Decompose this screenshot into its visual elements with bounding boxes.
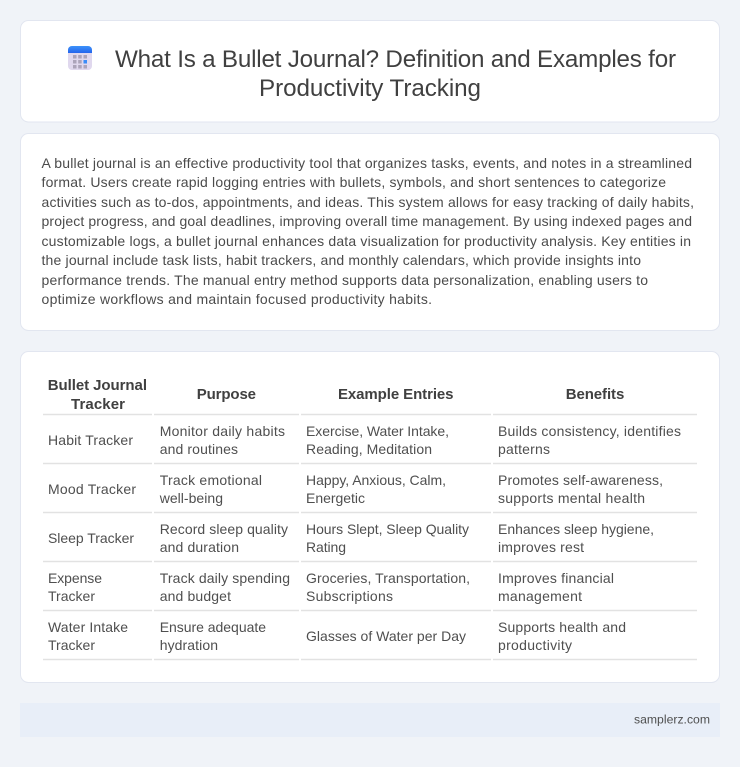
row: sleep tracker: Sleep Tracker [48, 530, 134, 546]
text block: definition paragraph: activities such as to-dos, appointments, and ideas. This system allows for easy tracking of daily habits, [42, 194, 694, 210]
title: Productivity Tracking [259, 75, 481, 102]
table header row: Benefits [566, 386, 624, 403]
row: water intake tracker [48, 619, 626, 653]
row: mood tracker: Track emotional [160, 472, 262, 488]
row: expense tracker: Improves financial [498, 570, 614, 586]
row: expense tracker: and budget [160, 588, 231, 604]
row: expense tracker: Expense [48, 570, 102, 586]
title [115, 46, 676, 102]
row: expense tracker: Groceries, Transportation, [306, 570, 470, 586]
table header row: Purpose [197, 386, 256, 403]
row: habit tracker: Habit Tracker [48, 432, 133, 448]
row: water intake tracker: hydration [160, 637, 218, 653]
text block: definition paragraph: optimize workflows and maintain focused productivity habits. [42, 291, 432, 307]
row: habit tracker: Exercise, Water Intake, [306, 423, 449, 439]
row: mood tracker [48, 472, 663, 506]
text block: definition paragraph [42, 155, 694, 307]
table row rules [43, 414, 697, 660]
row: expense tracker [48, 570, 614, 604]
row: water intake tracker: Ensure adequate [160, 619, 266, 635]
row: expense tracker: management [498, 588, 582, 604]
row: habit tracker [48, 423, 681, 457]
panel: tracker table [20, 352, 720, 682]
row: mood tracker: Promotes self-awareness, [498, 472, 663, 488]
row: sleep tracker: Hours Slept, Sleep Quality [306, 521, 469, 537]
row: sleep tracker: improves rest [498, 539, 584, 555]
row: water intake tracker: Glasses of Water per Day [306, 628, 466, 644]
row: habit tracker: Reading, Meditation [306, 441, 432, 457]
panel: header [20, 20, 720, 122]
row: expense tracker: Subscriptions [306, 588, 393, 604]
title: What Is a Bullet Journal? Definition and Examples for [115, 46, 676, 73]
row: sleep tracker: Rating [306, 539, 346, 555]
row: water intake tracker: productivity [498, 637, 572, 653]
footer bar [20, 703, 720, 737]
row: sleep tracker: Record sleep quality [160, 521, 288, 537]
row: water intake tracker: Tracker [48, 637, 95, 653]
row: mood tracker: Mood Tracker [48, 481, 136, 497]
panel: definition text [20, 134, 720, 330]
row: mood tracker: Energetic [306, 490, 365, 506]
icon: calendar [68, 46, 92, 70]
footer source text: samplerz.com [634, 712, 710, 726]
row: water intake tracker: Supports health and [498, 619, 626, 635]
row: expense tracker: Track daily spending [160, 570, 290, 586]
row: sleep tracker: Enhances sleep hygiene, [498, 521, 654, 537]
row: habit tracker: patterns [498, 441, 550, 457]
text block: definition paragraph: the journal include task lists, habit trackers, and monthly calendars, which provide insights into [42, 252, 641, 268]
text block: definition paragraph: A bullet journal is an effective productivity tool that organizes tasks, events, and notes in a streamlined [42, 155, 692, 171]
row: mood tracker: supports mental health [498, 490, 645, 506]
row: water intake tracker: Water Intake [48, 619, 128, 635]
row: sleep tracker: and duration [160, 539, 239, 555]
table header row: Example Entries [338, 386, 454, 403]
row: sleep tracker [48, 521, 654, 555]
text block: definition paragraph: project progress, and goal deadlines, improving overall time management. By using indexed pages and [42, 213, 692, 229]
text block: definition paragraph: performance trends. The manual entry method supports data personalization, enabling users to [42, 272, 648, 288]
text block: definition paragraph: format. Users create rapid logging entries with bullets, symbols, and short sentences to categorize [42, 174, 666, 190]
table header row: Bullet Journal [48, 377, 147, 394]
row: habit tracker: and routines [160, 441, 238, 457]
row: habit tracker: Monitor daily habits [160, 423, 285, 439]
row: mood tracker: Happy, Anxious, Calm, [306, 472, 446, 488]
table header row [48, 377, 624, 413]
row: expense tracker: Tracker [48, 588, 95, 604]
row: habit tracker: Builds consistency, identifies [498, 423, 681, 439]
row: mood tracker: well-being [159, 490, 223, 506]
table header row: Tracker [71, 396, 125, 413]
text block: definition paragraph: customizable logs, a bullet journal enhances data visualization for productivity analysis. Key entities in [42, 233, 691, 249]
